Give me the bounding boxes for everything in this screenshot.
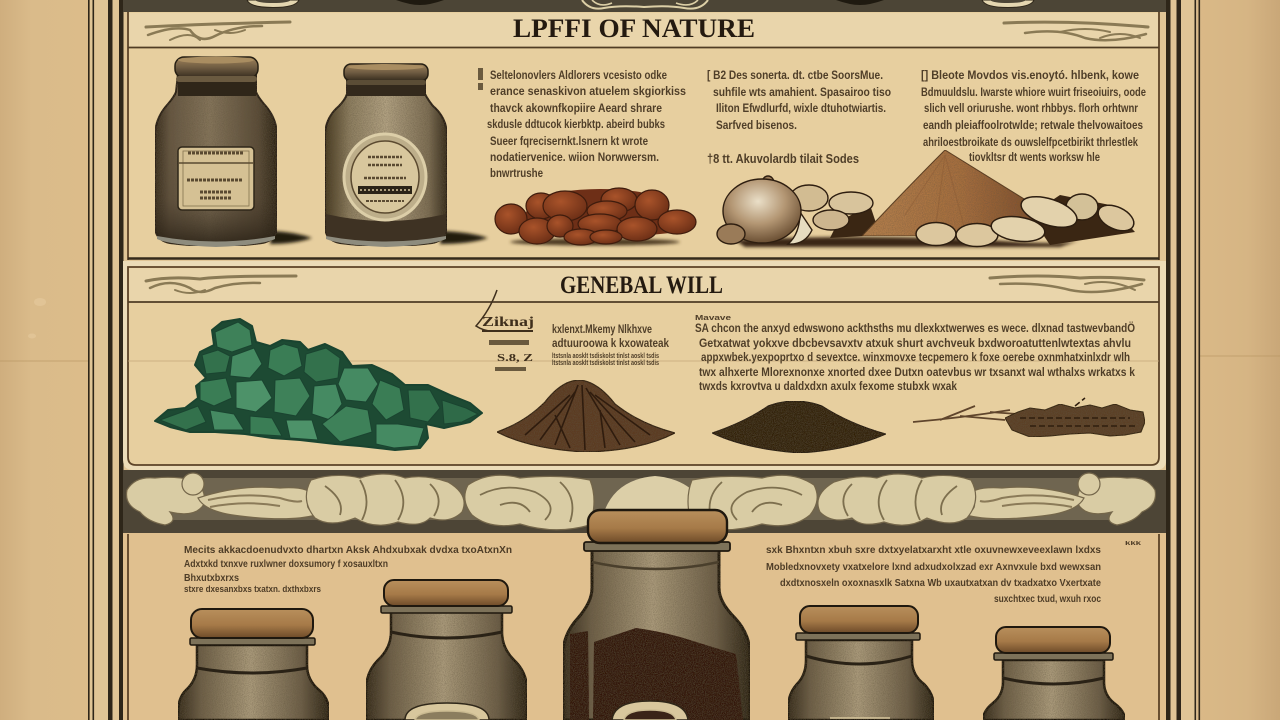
icon: small title mark — [476, 290, 534, 371]
text block: left note: Mecits akkacdoenudvxto dhartxn Aksk Ahdxubxak dvdxa txoAtxnXn — [184, 544, 512, 556]
text block: long note: Mavave — [695, 313, 731, 322]
jar label — [178, 147, 254, 210]
icon: first note marker — [478, 68, 483, 90]
text block: third note: tiovkltsr dt wents worksw hle — [969, 152, 1100, 164]
panel: nature — [123, 12, 1166, 266]
text block: third note: Bdmuuldslu. Iwarste whiore wuirt friseoiuirs, oode — [921, 87, 1146, 99]
illustration: onion and nuts — [717, 176, 1080, 247]
bottle contents — [570, 628, 743, 720]
text block: first note: erance senaskivon atuelem skgiorkiss — [490, 86, 686, 98]
text block: third note: ahriloestbroikate ds ouwslelfpcetbirikt thrlestlek — [923, 137, 1138, 149]
text block: first note: bnwrtrushe — [490, 168, 543, 180]
illustration: pale nuts — [916, 191, 1138, 246]
icon: bottle B — [366, 580, 527, 720]
illustration: brown mound — [497, 380, 675, 452]
text block: long note: SA chcon the anxyd edwswono ackthsths mu dlexkxtwerwes es wece. dlxnad tastwevbandÖ — [695, 322, 1135, 335]
centre bottle label — [612, 701, 688, 720]
icon: small title mark: Ziknaj — [482, 315, 534, 330]
text block: second note: suhfile wts amahient. Spasairoo tiso — [713, 87, 891, 99]
text block: left note: stxre dxesanxbxs txatxn. dxthxbxrs — [184, 584, 321, 595]
panel: bottle collection — [123, 510, 1166, 720]
text block: third note: eandh pleiaffoolrotwlde; retwale thelvowaitoes — [923, 120, 1143, 132]
bottle B label — [405, 703, 489, 720]
text block: right note: dxdtxnosxeln oxoxnasxlk Satxna Wb uxautxatxan dv txadxatxo Vxertxate — [780, 577, 1101, 589]
illustration: brown powder cone — [862, 150, 1045, 236]
text block: first note: Sueer fqrecisernkt.lsnern kt wrote — [490, 136, 648, 148]
text block: third note: slich vell oriurushe. wont rhbbys. florh orhtwnr — [924, 103, 1138, 115]
text block: second note: Sarfved bisenos. — [716, 120, 797, 132]
panel: general will — [123, 266, 1166, 470]
text block: first note: Seltelonovlers Aldlorers vcesisto odke — [490, 70, 667, 82]
text block: right note: sxk Bhxntxn xbuh sxre dxtxyelatxarxht xtle oxuvnewxeveexlawn lxdxs — [766, 544, 1101, 556]
text block: right note: kkk — [1125, 541, 1142, 547]
text block: short list: kxlenxt.Mkemy Nlkhxve — [552, 324, 652, 336]
text block: left note: Bhxutxbxrxs — [184, 572, 239, 584]
text block: first note: nodatiervenice. wiion Norwwersm. — [490, 152, 659, 164]
scrollwork left — [127, 473, 594, 530]
icon: jar with rectangular label — [155, 56, 312, 247]
text block: first note — [487, 70, 686, 180]
text block: right note: Mobledxnovxety vxatxelore lxnd adxudxolxzad exr Axnvxule bxd wewxsan — [766, 561, 1101, 573]
text block: long note: twxds kxrovtva u daldxdxn axulx fexome stubxk wxak — [699, 381, 958, 393]
text block: second note: Iliton Efwdlurfd, wixle dtuhotwiartis. — [716, 103, 886, 115]
text block: second note — [707, 70, 891, 166]
text block: right note: suxchtxec txud, wxuh rxoc — [994, 593, 1101, 605]
text block: short list: ltstsnla aosklt tsdiskolst tinlst aoskl tsdis — [552, 353, 659, 360]
icon: bottle A — [178, 609, 329, 720]
text block: left note: Adxtxkd txnxve ruxlwner doxsumory f xosauxltxn — [184, 558, 388, 570]
illustration: red beans — [495, 188, 696, 246]
heading: General Will: GENEBAL WILL — [560, 272, 723, 299]
text block: first note: thavck akownfkopiire Aeard shrare — [490, 103, 662, 115]
text block: short list — [552, 324, 670, 367]
oval label — [344, 134, 426, 220]
icon: small title mark: S.8, Z — [497, 352, 533, 364]
flourish: header left — [146, 276, 296, 293]
text block: first note: skdusle ddtucok kierbktp. abeird bubks — [487, 119, 665, 131]
text block: long note: Getxatwat yokxve dbcbevsavxtv atxuk shurt avchveuk bxdworoatuttenlwtextas ahvlu — [699, 338, 1131, 350]
text block: third note — [921, 70, 1146, 164]
flourish: header left — [146, 22, 290, 40]
illustration: green leaf pile — [155, 319, 482, 450]
icon: bottle D — [788, 606, 934, 720]
flourish: header right — [990, 276, 1144, 292]
top ornament band — [123, 0, 1166, 12]
flourish: header right — [1004, 22, 1148, 40]
illustration: dark mound — [712, 401, 886, 453]
icon: jar with oval label — [325, 64, 488, 247]
text block: third note: [] Bleote Movdos vis.enoytó. hlbenk, kowe — [921, 70, 1139, 82]
scrollwork right — [688, 473, 1155, 530]
icon: bottle E — [983, 627, 1125, 720]
text block: long note: appxwbek.yexpoprtxo d sevextce. winxmovxe tecpemero k foxe oerebe oxnmhatxinlxdr wlh — [701, 352, 1130, 364]
text block: second note: [ B2 Des sonerta. dt. ctbe SoorsMue. — [707, 70, 883, 82]
illustration: twig pile — [913, 398, 1145, 437]
text block: short list: adtuuroowa k kxowateak — [552, 338, 670, 350]
text block: right note — [766, 541, 1142, 605]
text block: second note: †8 tt. Akuvolardb tilait Sodes — [707, 151, 859, 166]
text block: long note — [695, 313, 1136, 393]
icon: centre bottle — [563, 510, 750, 720]
text block: short list: ltstsnla aosklt tsdiskolst tinlst aoskl tsdis — [552, 360, 659, 367]
text block: long note: twx alhxerte Mlorexnonxe xnorted dxee Dutxn oatevbus wr txsanxt wal wthalxs wrkatxs k — [699, 367, 1136, 379]
text block: left note — [184, 544, 512, 595]
heading: LPFFI of Nature: LPFFI OF NATURE — [513, 14, 755, 43]
ornamental scroll band — [123, 470, 1166, 533]
